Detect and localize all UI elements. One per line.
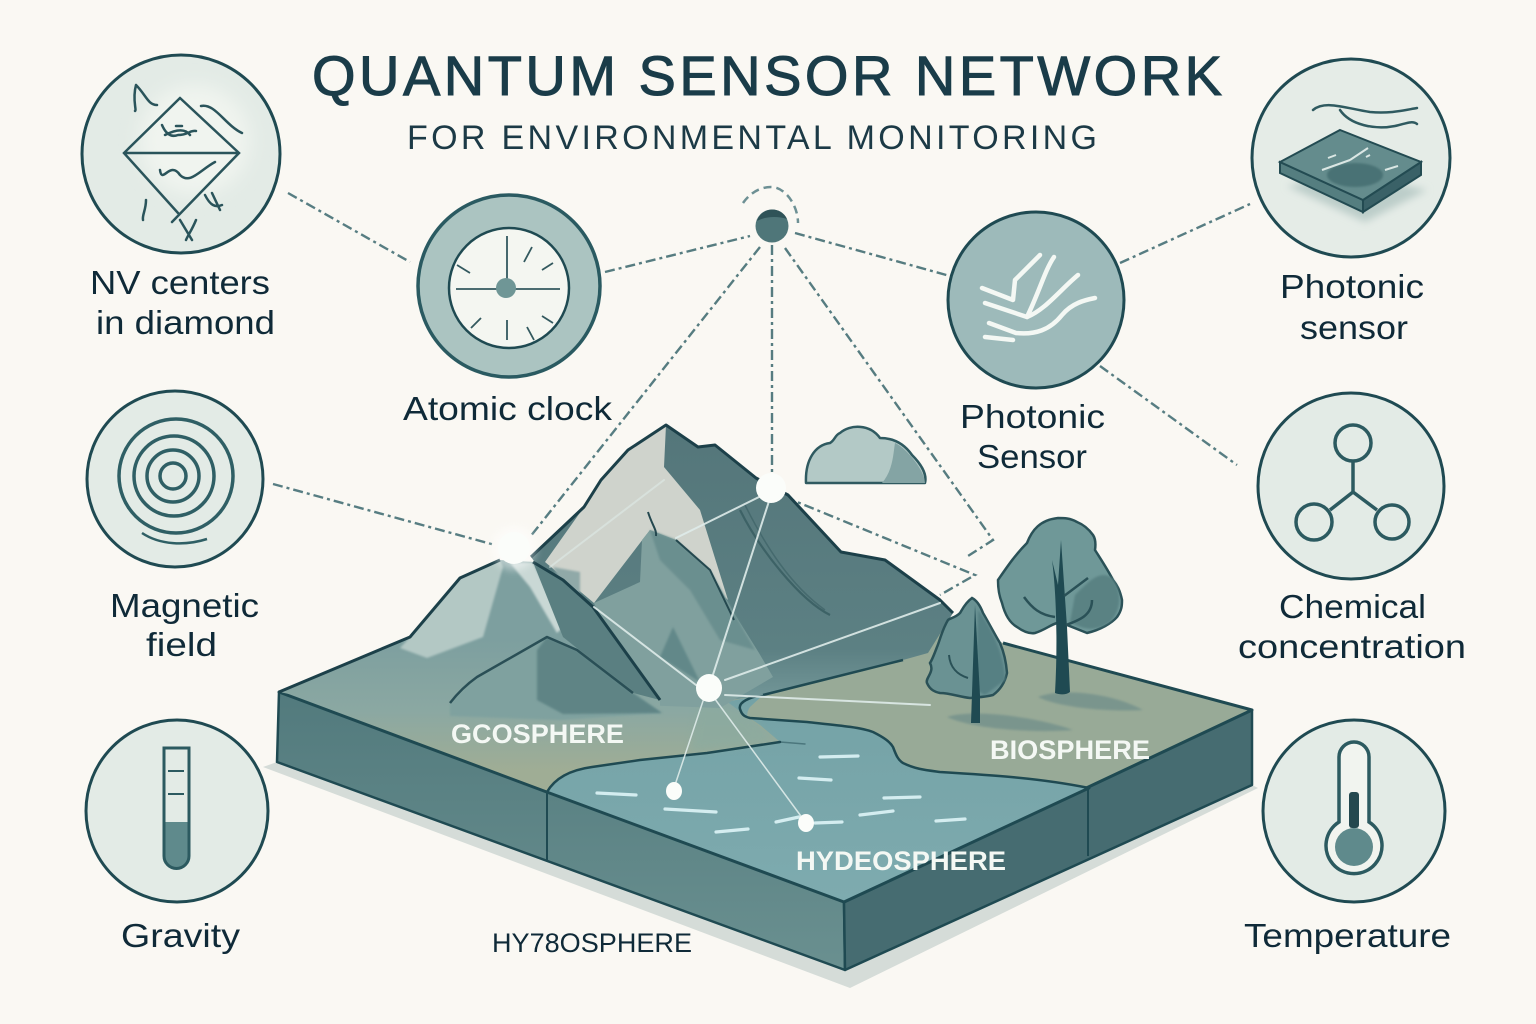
water (547, 695, 1089, 902)
ground shadow (263, 762, 1258, 988)
icon: clock ticks (456, 236, 560, 340)
panel: NV centers in diamond (82, 55, 280, 341)
middle peak (594, 530, 773, 708)
panel: gravity (86, 720, 268, 954)
label: hydrosphere: HYDEOSPHERE (796, 846, 1006, 876)
dark right face (533, 562, 660, 700)
label: sensor (1300, 309, 1408, 346)
label (1238, 588, 1466, 665)
label: concentration (1238, 628, 1466, 665)
main mountain outline (531, 425, 953, 613)
icon: light streaks (982, 255, 1095, 340)
icon: diamond (124, 85, 242, 240)
shore lines (279, 692, 1089, 902)
panel: temperature (1244, 720, 1451, 954)
panel: atomic clock (403, 195, 613, 427)
label: hydrosphere below block: HY78OSPHERE (492, 928, 692, 958)
tree: large (998, 518, 1143, 710)
label: Photonic (960, 398, 1105, 435)
label: Temperature (1244, 917, 1451, 954)
sphere labels (451, 719, 1150, 876)
label (110, 587, 259, 663)
panel: chemical concentration (1238, 393, 1466, 665)
label: in diamond (96, 304, 275, 341)
network dashed links (273, 193, 1250, 595)
label: Atomic clock (403, 390, 613, 427)
left land blend (279, 560, 780, 792)
panel: magnetic field (87, 391, 263, 663)
icon: thermometer (1326, 742, 1382, 874)
icon: wave lines (1313, 105, 1417, 127)
land surface (279, 600, 1252, 902)
sensor network lines (550, 480, 940, 823)
icon: test tube (164, 748, 189, 868)
water highlights (597, 756, 965, 832)
label: Gravity (121, 917, 241, 954)
label (1280, 268, 1424, 346)
label: Sensor (977, 438, 1087, 475)
panel: photonic sensor (right) (1252, 59, 1450, 346)
sensor nodes (492, 473, 814, 832)
panel: photonic sensor (centre) (948, 212, 1124, 475)
snow streak (510, 562, 563, 633)
mountain range (279, 425, 953, 725)
label: geosphere: GCOSPHERE (451, 719, 624, 749)
block side faces (277, 692, 1252, 970)
left mountain body (279, 560, 660, 725)
left mountain outline (279, 560, 660, 700)
label: biosphere: BIOSPHERE (990, 735, 1150, 765)
satellite node (743, 187, 798, 242)
icon: sensor chip (1280, 130, 1427, 222)
label: Chemical (1279, 588, 1426, 625)
trees (927, 518, 1143, 731)
subtitle: FOR ENVIRONMENTAL MONITORING (407, 119, 1097, 157)
label: Magnetic (110, 587, 259, 624)
tree: small (927, 598, 1073, 731)
light slope (400, 560, 503, 658)
icon: concentric rings (119, 419, 233, 543)
label: field (146, 626, 217, 663)
title: QUANTUM SENSOR NETWORK (312, 44, 1222, 107)
diorama: ecosystem block (263, 560, 1258, 988)
label (960, 398, 1105, 475)
label: NV centers (90, 264, 270, 301)
main mountain (531, 425, 953, 705)
icon: molecule (1296, 425, 1409, 540)
front ridge (450, 637, 662, 720)
cloud (806, 427, 925, 483)
light rock face (545, 425, 728, 603)
label (90, 264, 275, 341)
label: Photonic (1280, 268, 1424, 305)
